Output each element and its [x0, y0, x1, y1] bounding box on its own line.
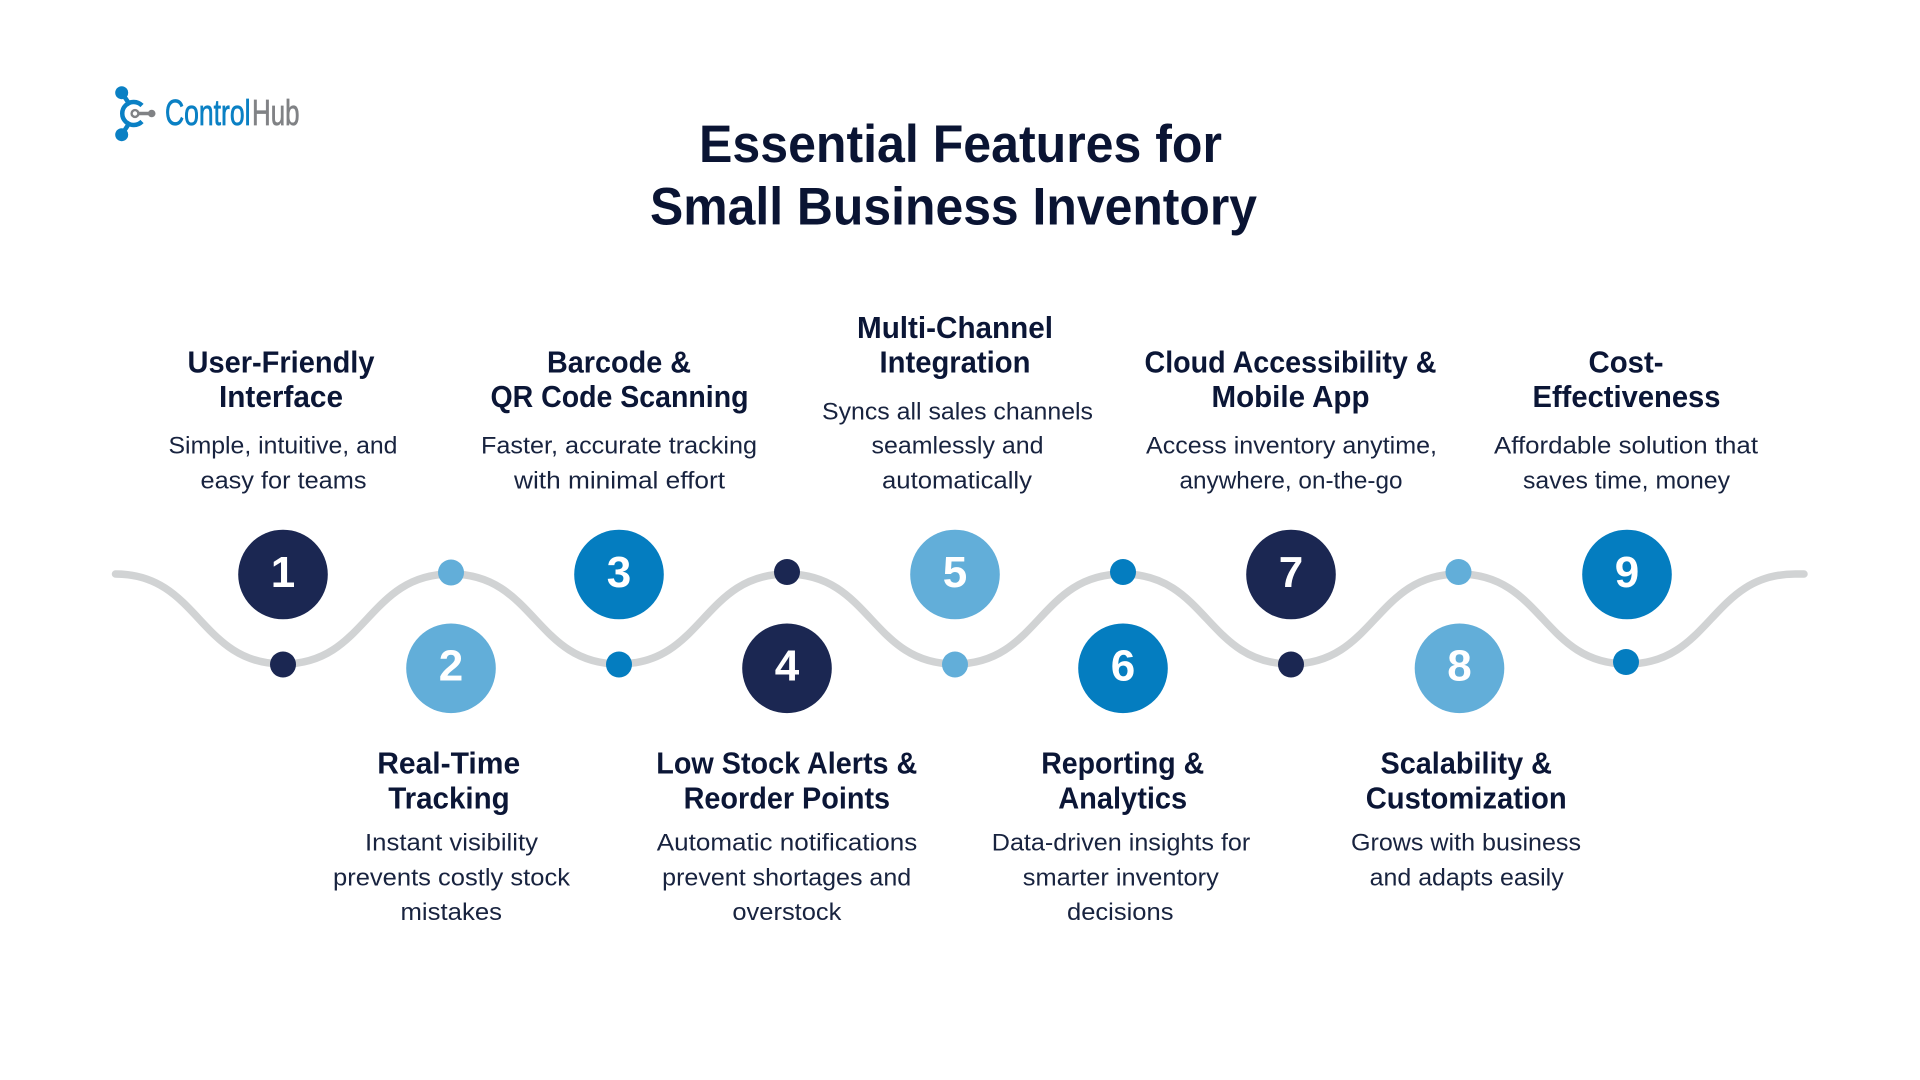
step 2 heading: Tracking: [388, 780, 510, 816]
step 5 heading: Integration: [880, 345, 1030, 380]
step 8 heading: Scalability &: [1380, 746, 1552, 780]
step 4 dot: [774, 559, 800, 585]
step 4 number badge: [742, 624, 832, 713]
step 2 dot: [438, 560, 464, 586]
step 1: [168, 345, 398, 678]
step 2 description: prevents costly stock: [333, 865, 571, 892]
step 9 description: Affordable solution that: [1494, 432, 1758, 460]
step 5 number badge: [910, 530, 1000, 619]
step 5 description: seamlessly and: [872, 432, 1044, 460]
step 8 heading: [1366, 746, 1567, 816]
step 5 description: Syncs all sales channels: [822, 398, 1093, 425]
title: Essential Features for: [699, 115, 1222, 174]
step 4 heading: Reorder Points: [684, 780, 890, 816]
step 2 heading: Real-Time: [377, 746, 520, 780]
step 6 description: smarter inventory: [1023, 865, 1220, 892]
step 6 heading: Analytics: [1058, 780, 1187, 816]
step 8 number badge: 8: [1447, 642, 1472, 690]
step 6 heading: [1041, 746, 1204, 816]
step 8 description: Grows with business: [1351, 830, 1581, 857]
step 6 dot: [1110, 559, 1136, 585]
step 3 number badge: 3: [607, 548, 631, 597]
step 3 heading: QR Code Scanning: [490, 379, 748, 414]
step 3: [481, 345, 757, 678]
step 2 number badge: [406, 624, 496, 713]
step 9 description: saves time, money: [1523, 468, 1731, 494]
step 2 heading: [377, 746, 520, 816]
step 3 number badge: [574, 530, 664, 619]
step 3 heading: [490, 345, 748, 414]
step 2 number badge: 2: [439, 642, 463, 690]
step 2 description: Instant visibility: [365, 830, 539, 857]
step 7 dot: [1278, 652, 1304, 678]
step 3 description: Faster, accurate tracking: [481, 432, 757, 460]
step 5 heading: Multi-Channel: [857, 310, 1053, 345]
step 1 dot: [270, 652, 296, 678]
step 2 description: mistakes: [400, 899, 502, 926]
step 8 number badge: [1415, 624, 1504, 713]
step 7 description: [1146, 432, 1437, 494]
logo wordmark: Hub: [252, 92, 300, 133]
step 9: [1494, 345, 1758, 675]
step 1 number badge: 1: [271, 548, 295, 597]
step 6: [992, 559, 1250, 926]
icon: hub node: [115, 86, 156, 141]
step 1 description: Simple, intuitive, and: [168, 432, 398, 460]
step 5: [822, 310, 1093, 678]
step 7 heading: [1144, 345, 1436, 414]
step 8 description: [1351, 830, 1581, 892]
step 7 description: Access inventory anytime,: [1146, 432, 1437, 460]
step 8 description: and adapts easily: [1370, 865, 1564, 892]
step 4 description: overstock: [732, 899, 842, 926]
step 4: [656, 559, 917, 926]
step 2: [333, 560, 571, 926]
step 6 number badge: [1078, 624, 1168, 713]
step 7 heading: Mobile App: [1212, 379, 1370, 414]
step 5 description: automatically: [882, 468, 1033, 494]
logo: ControlHub: [115, 86, 300, 141]
step 4 description: Automatic notifications: [657, 830, 917, 857]
step 9 description: [1494, 432, 1758, 494]
step 4 heading: [656, 746, 917, 816]
step 7 description: anywhere, on-the-go: [1180, 468, 1402, 494]
step 6 description: [992, 830, 1250, 926]
step 8 heading: Customization: [1366, 780, 1567, 816]
logo wordmark: Control: [165, 92, 250, 133]
step 6 number badge: 6: [1111, 642, 1135, 690]
step 3 description: with minimal effort: [513, 468, 725, 494]
step 9 dot: [1613, 649, 1639, 675]
step 3 dot: [606, 652, 632, 678]
title: [650, 115, 1257, 236]
step 4 heading: Low Stock Alerts &: [656, 746, 917, 780]
step 6 description: decisions: [1067, 899, 1174, 926]
step 9 number badge: 9: [1615, 548, 1639, 597]
step 9 heading: Effectiveness: [1532, 379, 1720, 414]
step 3 description: [481, 432, 757, 494]
step 4 description: prevent shortages and: [662, 865, 911, 892]
title: Small Business Inventory: [650, 178, 1257, 236]
step 2 description: [333, 830, 571, 926]
step 1 heading: [188, 345, 375, 414]
step 9 heading: [1532, 345, 1720, 414]
step 9 heading: Cost-: [1588, 345, 1664, 380]
step 1 description: [168, 432, 398, 494]
step 1 heading: User-Friendly: [188, 345, 375, 380]
step 9 number badge: [1582, 530, 1672, 619]
step 7: [1144, 345, 1437, 678]
step 8 dot: [1446, 559, 1472, 585]
step 7 heading: Cloud Accessibility &: [1144, 345, 1436, 380]
step 1 description: easy for teams: [200, 468, 366, 494]
step 3 heading: Barcode &: [547, 345, 691, 380]
step 4 description: [657, 830, 917, 926]
step 5 heading: [857, 310, 1053, 380]
wave timeline: [116, 574, 1804, 664]
step 1 heading: Interface: [219, 379, 343, 414]
step 5 description: [822, 398, 1093, 494]
step 6 heading: Reporting &: [1041, 746, 1204, 780]
step 7 number badge: [1246, 530, 1336, 619]
step 4 number badge: 4: [775, 642, 800, 690]
step 7 number badge: 7: [1279, 548, 1303, 597]
step 5 dot: [942, 652, 968, 678]
step 8: [1351, 559, 1581, 892]
step 1 number badge: [238, 530, 328, 619]
step 5 number badge: 5: [943, 548, 967, 597]
step 6 description: Data-driven insights for: [992, 830, 1250, 857]
